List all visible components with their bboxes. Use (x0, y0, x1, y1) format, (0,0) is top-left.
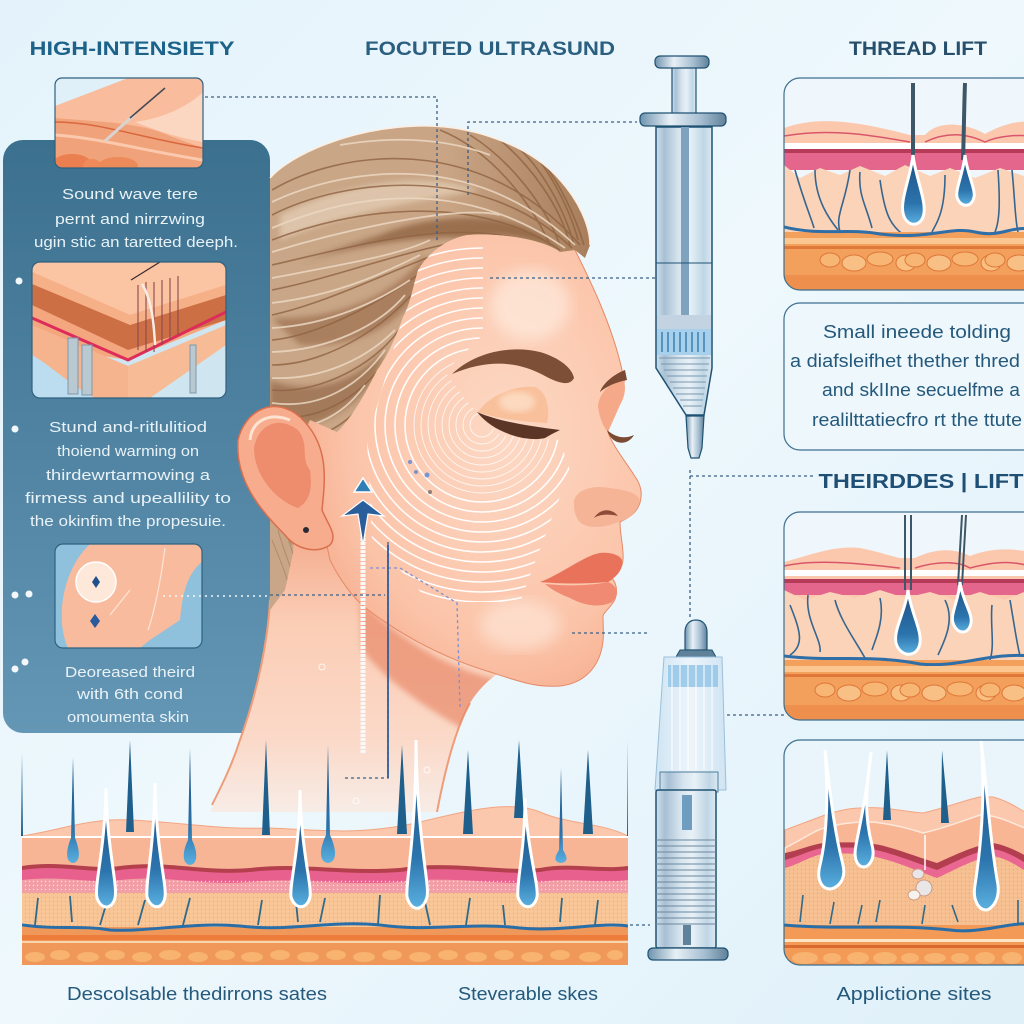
heading: thread lift: THREAD LIFT (849, 39, 987, 60)
eyebrow (452, 349, 574, 383)
panel: skin cross-section top right (784, 78, 1024, 290)
far eyebrow (600, 370, 627, 392)
panel: skin cross-section bottom right (784, 740, 1024, 965)
heading: high-intensity: HIGH-INTENSIETY (30, 39, 235, 60)
skin spots (319, 664, 430, 804)
image: needle into skin tile (54, 78, 203, 175)
text: decreased thread: omoumenta skin (67, 709, 189, 726)
hair rim (270, 126, 590, 245)
eyelashes (477, 412, 560, 439)
text: decreased thread (65, 664, 195, 726)
far eye socket (598, 378, 625, 432)
chin highlight (480, 600, 560, 650)
nose (574, 487, 640, 527)
heading: focused ultrasound: FOCUTED ULTRASUND (365, 39, 615, 60)
jaw shadow (360, 600, 500, 730)
icon: needle (105, 88, 165, 141)
connector: blue line (387, 545, 389, 778)
face (300, 231, 641, 686)
text: sound waves: Sound wave tere (62, 186, 198, 203)
image: skin layers block tile (32, 262, 226, 398)
text: warming description: thirdewrtarmowing a (46, 467, 211, 484)
neck outlines (212, 600, 470, 812)
text: sound waves (34, 186, 238, 251)
panel: bottom skin cross-section (21, 740, 628, 965)
panel: text box right: and skIIne secuelfme a (822, 380, 1021, 400)
syringe: upper (640, 56, 726, 458)
panel: text box right (784, 303, 1024, 450)
panel: skin cross-section middle right (784, 512, 1024, 720)
far lashes (607, 430, 634, 443)
eyelid (478, 387, 548, 423)
caption: right: Applictione sites (836, 984, 992, 1004)
frame (32, 262, 226, 398)
caption: middle: Steverable skes (458, 984, 598, 1004)
image: treated skin tile (55, 544, 202, 648)
text: sound waves: ugin stic an taretted deeph. (34, 234, 238, 251)
small blue marks on cheek (408, 460, 432, 494)
text: decreased thread: with 6th cond (76, 686, 183, 703)
text: warming description: thoiend warming on (57, 443, 199, 460)
heading: threads lift: THEIRDDES | LIFT (818, 471, 1024, 493)
illustration: woman's head in profile (210, 126, 659, 812)
text: warming description: the okinfim the propesuie. (30, 513, 226, 530)
text: warming description: firmess and upeallility to (25, 490, 231, 507)
lips (540, 553, 622, 605)
text: sound waves: pernt and nirrzwing (55, 211, 205, 228)
arrow up (342, 478, 384, 753)
hair spikes (21, 740, 628, 836)
syringe: lower (648, 620, 728, 960)
connector lines (205, 97, 815, 925)
panel: left info panel (3, 140, 270, 733)
neck (210, 520, 500, 812)
earring (303, 527, 309, 533)
forehead highlight (490, 270, 570, 340)
text: warming description (25, 419, 231, 530)
panel: text box right: realilttatiecfro rt the ttute (812, 410, 1022, 430)
follicles short (67, 745, 567, 865)
hair strands (270, 130, 584, 590)
frame (55, 544, 202, 648)
bullets (12, 278, 32, 672)
connector: white dotted on tile (163, 595, 270, 597)
frame (55, 78, 203, 168)
ultrasound concentric arcs (367, 247, 570, 602)
panel: text box right: Small ineede tolding (823, 322, 1011, 342)
caption: left: Descolsable thedirrons sates (67, 984, 327, 1004)
text: warming description: Stund and-ritlulitiod (49, 419, 207, 436)
text: decreased thread: Deoreased theird (65, 664, 195, 681)
ear (238, 407, 333, 550)
follicles deep (96, 740, 537, 908)
panel: text box right: a diafsleifhet thether thred (790, 351, 1020, 371)
hair (270, 126, 590, 610)
